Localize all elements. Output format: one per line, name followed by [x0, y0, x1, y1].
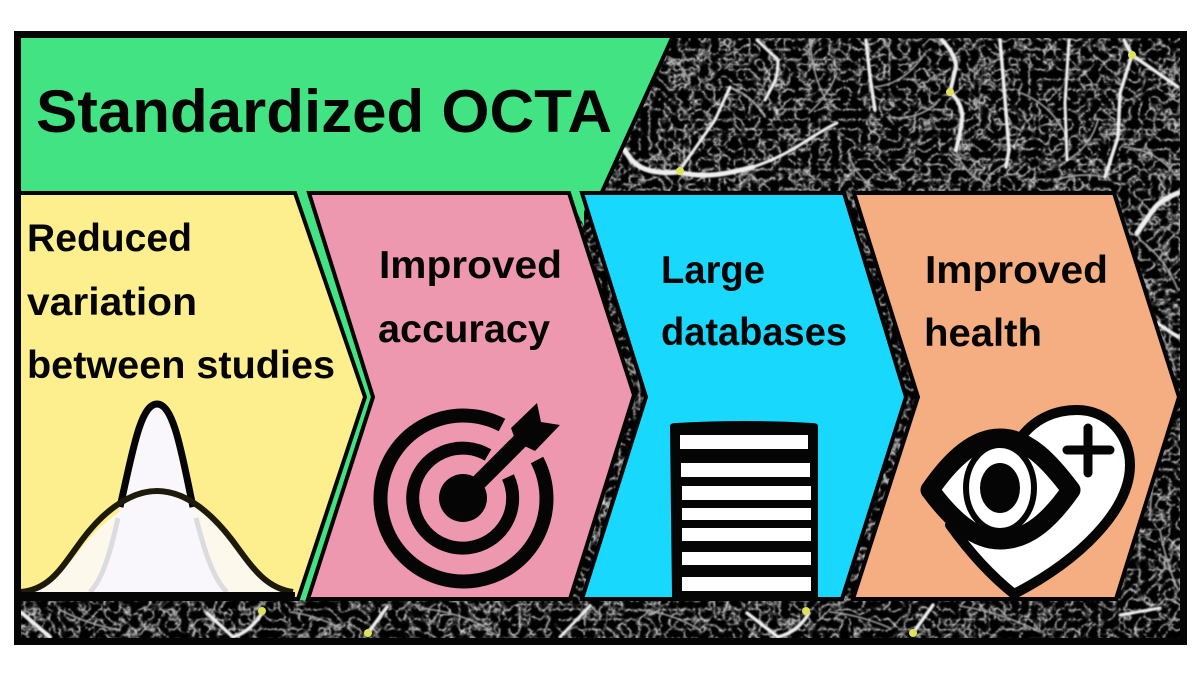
icon: eye over heart with plus [930, 410, 1130, 594]
panel: improved accuracy [308, 193, 634, 599]
panel: green title banner [19, 36, 673, 600]
text: reduced variation heading: between studies [27, 344, 335, 387]
text: improved health heading: health [924, 312, 1042, 355]
text: improved health heading [924, 249, 1108, 355]
panel: large databases [582, 193, 906, 601]
text: improved accuracy heading: accuracy [378, 308, 550, 351]
title: Standardized OCTA [36, 78, 612, 145]
text: reduced variation heading: Reduced [27, 217, 192, 260]
text: improved accuracy heading [378, 244, 562, 351]
text: improved health heading: Improved [925, 249, 1108, 292]
text: reduced variation heading: variation [27, 281, 197, 324]
panel: improved health [853, 193, 1179, 599]
text: improved accuracy heading: Improved [379, 244, 562, 287]
icon: target with arrow [380, 403, 560, 582]
icon: database stack [670, 421, 818, 601]
text: reduced variation heading [27, 217, 335, 387]
text: large databases heading: Large [661, 249, 765, 292]
text: large databases heading: databases [661, 311, 847, 354]
panel: reduced variation between studies [19, 193, 365, 599]
chart: two overlapping bell curves [20, 404, 295, 599]
text: large databases heading [661, 249, 847, 354]
